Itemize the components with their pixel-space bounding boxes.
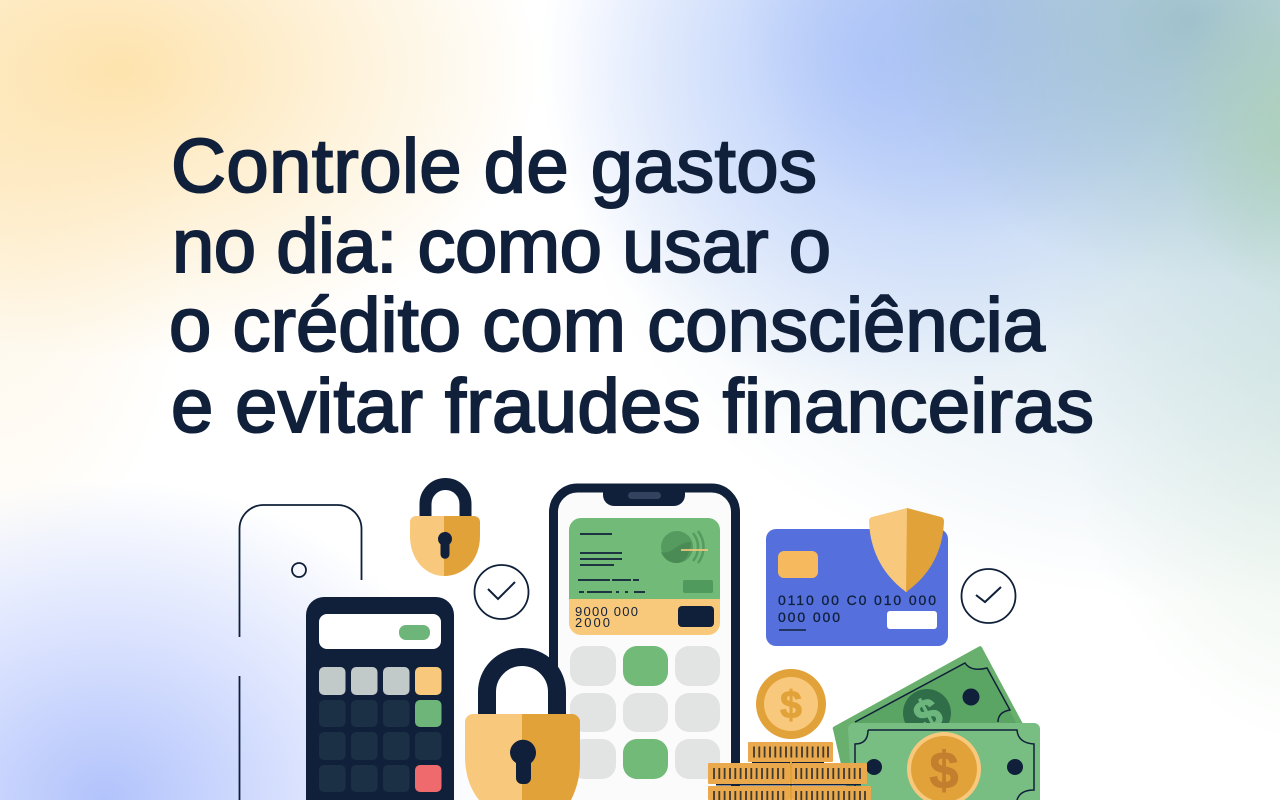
icon: credit card with shield: 000 000 [778,609,840,625]
screen card: 2000 [575,615,610,630]
icon: back banknote: $ [906,688,950,743]
title: e evitar fraudes financeiras [171,364,1094,449]
title: Controle de gastos [171,124,817,209]
icon: front banknote [848,723,1040,800]
shield [869,508,944,592]
icon: coin [756,669,826,739]
screen buttons [570,646,720,779]
icon: large padlock [465,657,580,800]
icon: credit card with shield: 0110 00 C0 010 000 [778,592,936,608]
icon: calculator [306,597,454,800]
screen card [569,518,720,635]
screen card: 9000 000 [575,604,638,619]
icon: outline phone [240,505,362,800]
icon: credit card with shield [766,508,948,646]
title: o crédito com consciência [169,283,1046,368]
icon: small padlock [410,484,480,576]
title: no dia: como usar o [172,204,831,289]
icon: smartphone [554,488,736,800]
title [169,124,1094,449]
icon: coin: $ [780,684,802,727]
icon: check badge right [962,569,1016,623]
icon: check badge left [474,565,528,619]
icon: back banknote [833,646,1026,800]
icon: coin stacks [708,742,871,800]
icon: front banknote: $ [930,742,959,800]
